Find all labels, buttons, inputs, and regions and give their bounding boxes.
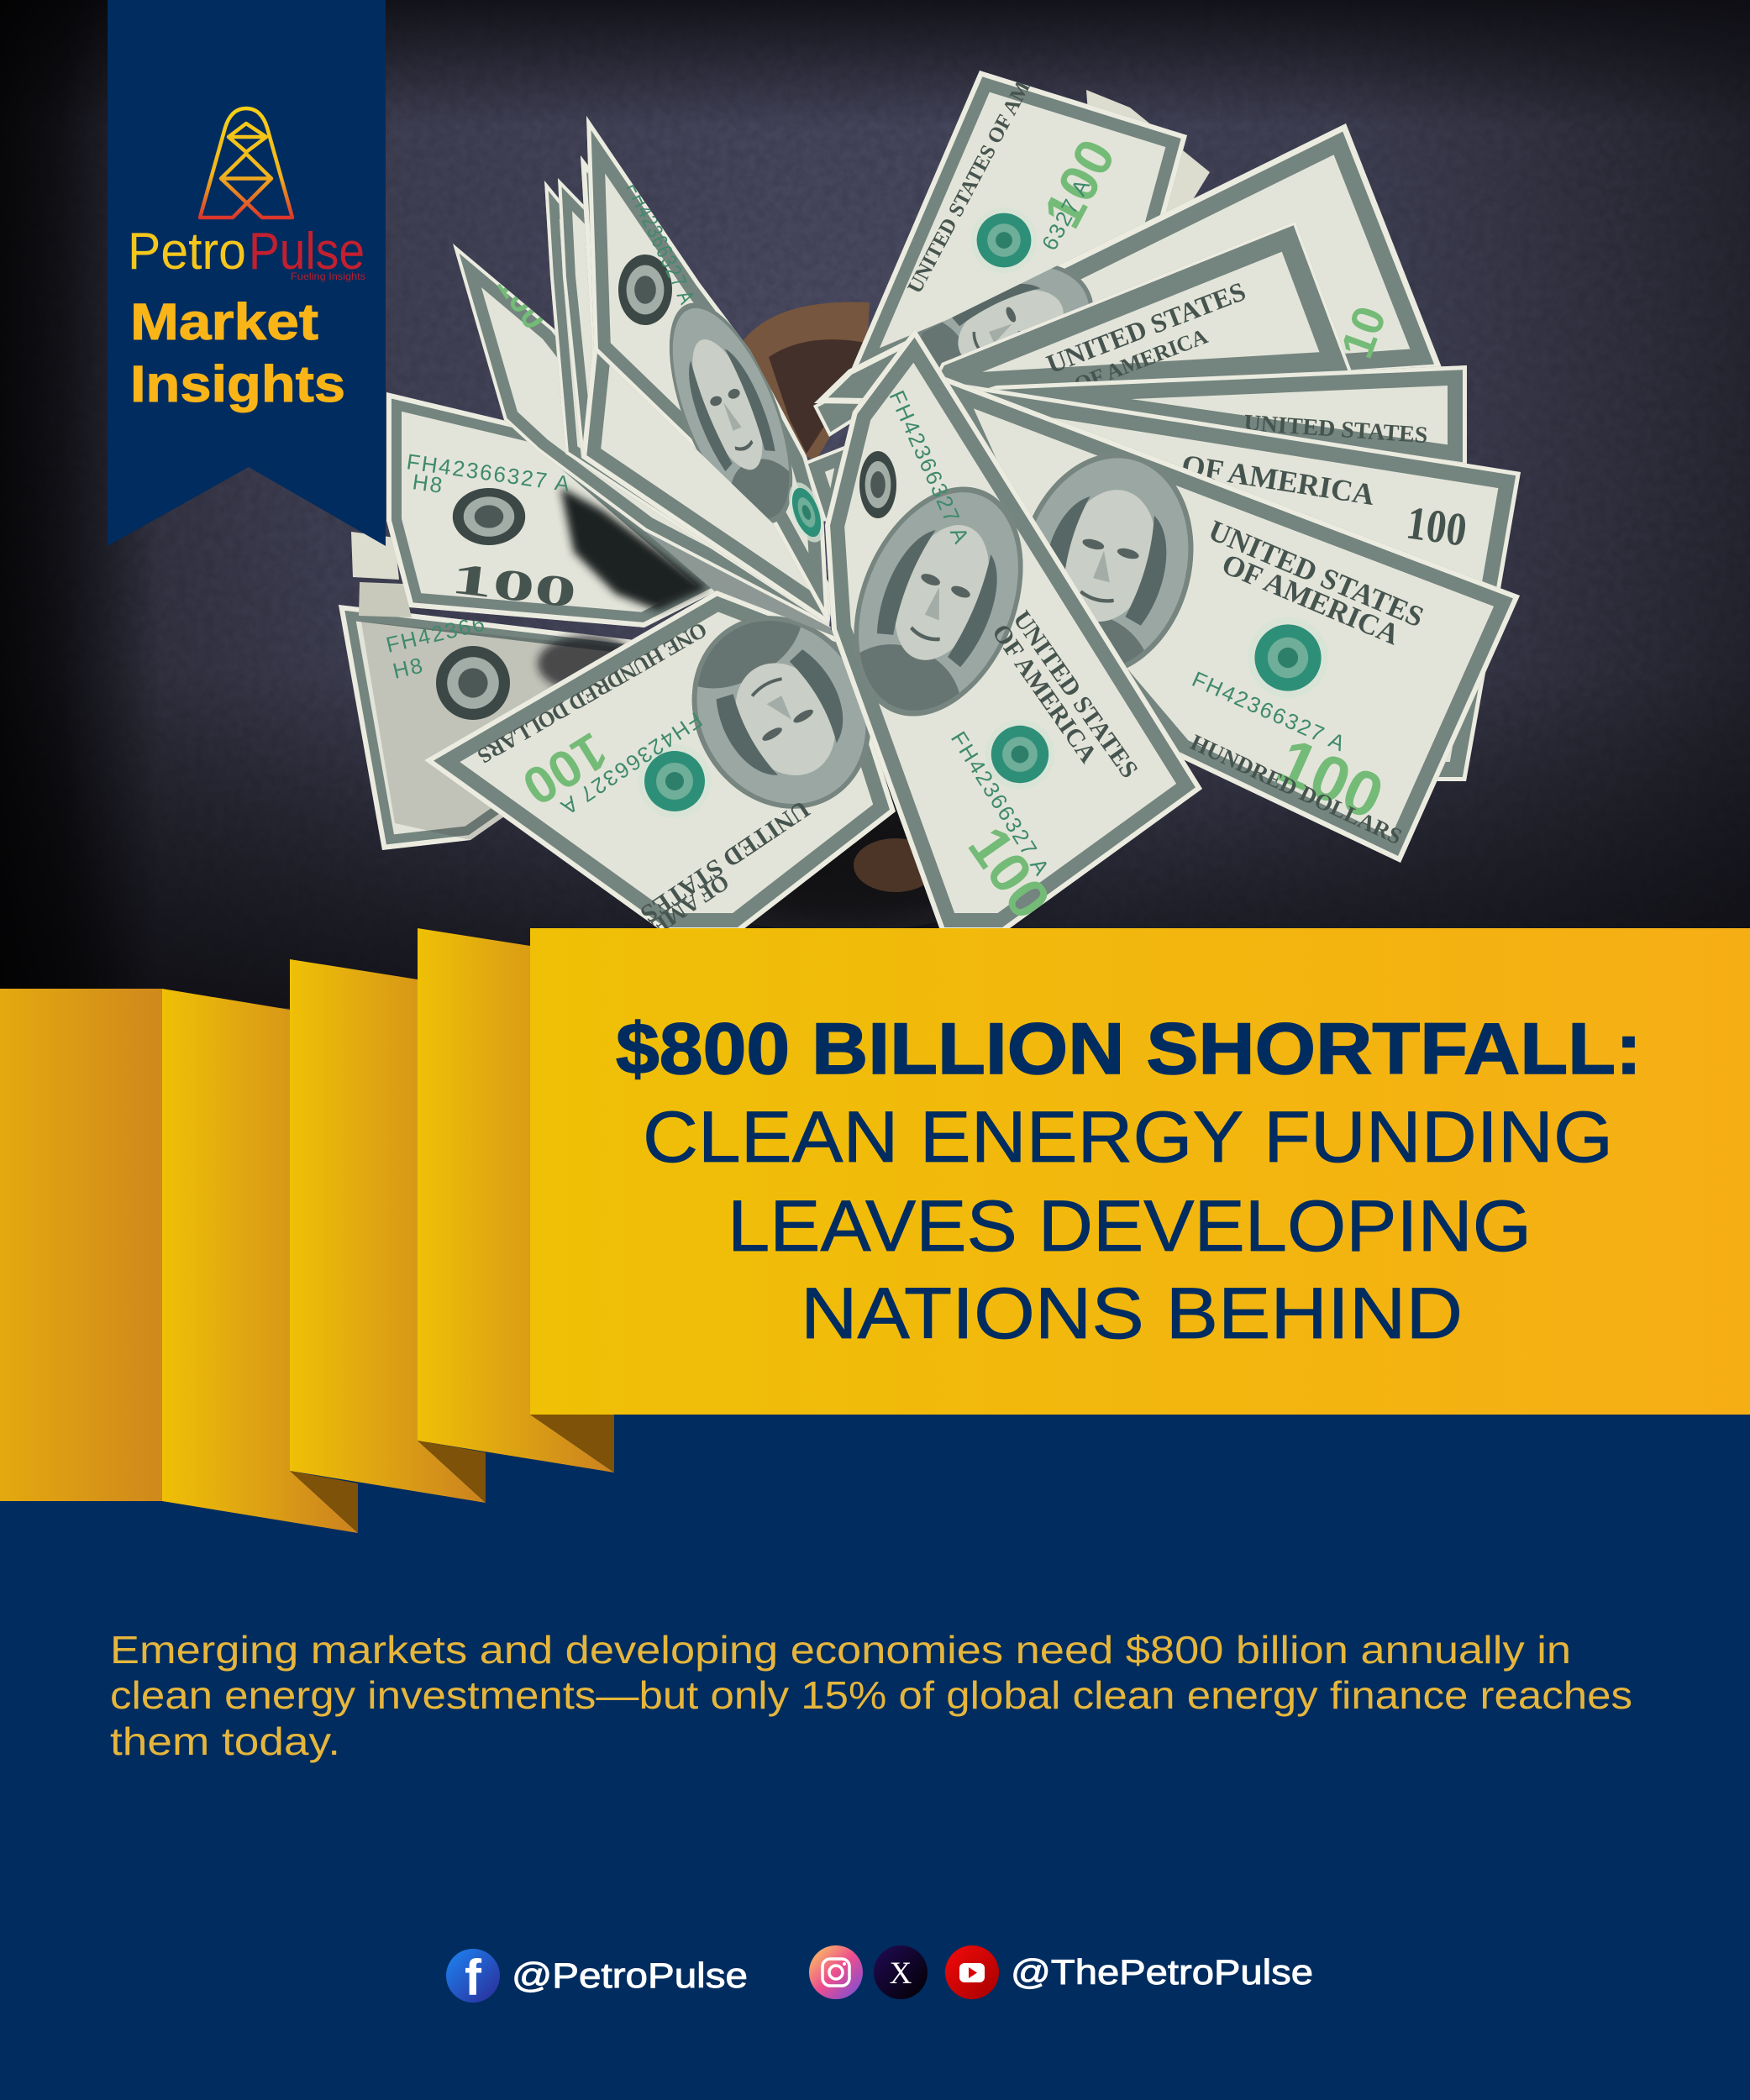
- bill: front right with portrait: FH42366327 A: [1189, 666, 1350, 757]
- icon: instagram: [809, 1945, 863, 1999]
- ribbon panel 4: [418, 928, 614, 1473]
- handle: ThePetroPulse: @ThePetroPulse: [1011, 1952, 1313, 1992]
- photo background: dark textured surface: [0, 0, 1750, 1176]
- stacked bill edges at far left: [351, 532, 412, 617]
- back bill: lower left: [339, 605, 655, 850]
- bill: front centre: FH42366327 A: [946, 727, 1055, 881]
- bill: front centre: UNITED STATES: [1007, 606, 1143, 783]
- title text: $800 BILLION SHORTFALL:: [616, 1009, 1642, 1089]
- title text: LEAVES DEVELOPING: [728, 1186, 1532, 1267]
- icon: X: [874, 1945, 928, 1999]
- bill: right middle with large 100: OF AMERICA: [1180, 448, 1377, 512]
- bill: upper right top: [852, 71, 1187, 368]
- logo wordmark: Pulse: [249, 223, 365, 281]
- bill: front right with portrait: OF AMERICA: [1217, 547, 1405, 652]
- bill: front centre: FH42366327 A: [885, 386, 975, 549]
- icon: X: X: [890, 1956, 912, 1991]
- back bill: lower left: H8: [391, 652, 427, 684]
- top-left navy bookmark banner: [108, 0, 386, 546]
- bill: lower left upside down: 100: [512, 721, 617, 816]
- bill: front right with portrait: UNITED STATES: [1204, 513, 1428, 633]
- title text: CLEAN ENERGY FUNDING: [643, 1097, 1613, 1178]
- bill: lower left upside down: [425, 591, 896, 928]
- upper-left fanned bills: [453, 155, 832, 628]
- back bill: left with serial number: H8: [411, 469, 445, 498]
- bill: lower left upside down: ONE HUNDRED DOLLARS: [474, 617, 711, 769]
- bill: front centre: [820, 328, 1202, 932]
- main left-fan bill: FH42366327 A: [622, 178, 700, 308]
- bill: lower left upside down: UNITED STATES: [635, 795, 815, 928]
- ribbon panel 1: [0, 989, 162, 1501]
- logo wordmark: Petro: [128, 223, 246, 281]
- navy lower background: [0, 1176, 1750, 2100]
- bill: lower left upside down: FH42366327 A: [555, 707, 707, 821]
- paragraph: clean energy investments—but only 15% of global clean energy finance reaches: [110, 1673, 1632, 1717]
- back small piece of top bill: [1086, 90, 1210, 227]
- paragraph: [110, 1628, 1632, 1763]
- ribbon fold shadow 3: [418, 1441, 486, 1503]
- ribbon fold shadow 4: [530, 1415, 614, 1473]
- icon: facebook: f: [465, 1950, 482, 2006]
- ribbon fold shadow 2: [290, 1471, 358, 1533]
- icon: youtube: [945, 1945, 999, 1999]
- upper-left fanned bills: 100: [490, 265, 555, 337]
- icon: facebook: [446, 1949, 500, 2006]
- small bills in the fan centre: [804, 403, 859, 522]
- bill: lower left upside down: OF AMERICA: [598, 869, 733, 972]
- bill: upper right large: 10: [1332, 300, 1396, 365]
- bill: front centre: 100: [956, 816, 1063, 931]
- back bill: left with serial number: [386, 392, 723, 627]
- bill: upper right top: 100: [1032, 129, 1127, 238]
- bill: horizontal right: UNITED STATES: [1243, 410, 1428, 449]
- burlap bag opening: [639, 302, 1042, 932]
- bill: upper right top: 6327 A: [1037, 174, 1096, 255]
- shaded bill between the fan and the lower-left bill: [644, 531, 849, 664]
- back bill: left with serial number: FH42366327 A: [405, 449, 573, 496]
- bill: right middle with large 100: [924, 378, 1521, 781]
- logo: PetroPulse tower: [200, 108, 292, 218]
- bill: upper right second: UNITED STATES: [1043, 276, 1249, 380]
- social handles: [446, 1945, 1313, 2006]
- handle: PetroPulse: @PetroPulse: [512, 1956, 748, 1995]
- logo wordmark: Fueling Insights: [291, 270, 365, 282]
- back bill: lower left: FH42366: [384, 610, 488, 658]
- bill: right middle with large 100: 100: [1403, 497, 1469, 557]
- title text: NATIONS BEHIND: [801, 1273, 1463, 1354]
- folded ribbon: [0, 928, 614, 1533]
- bill: front right with portrait: [937, 374, 1520, 863]
- bill: upper right large: [814, 123, 1443, 430]
- paragraph: Emerging markets and developing economies need $800 billion annually in: [110, 1628, 1571, 1672]
- heading: Market Insights: Insights: [130, 355, 345, 412]
- heading: Market Insights: Market: [130, 293, 318, 350]
- bill: upper right second: OF AMERICA: [1071, 323, 1211, 397]
- paragraph: them today.: [110, 1719, 340, 1763]
- main left-fan bill: [586, 116, 831, 626]
- title text: [616, 1009, 1642, 1354]
- heading: Market Insights: [130, 293, 345, 412]
- bill: upper right top: UNITED STATES OF AMERICA: [903, 18, 1067, 297]
- bill: horizontal right: [966, 365, 1467, 467]
- title banner: [530, 928, 1750, 1415]
- bill: front right with portrait: HUNDRED DOLLARS: [1186, 729, 1406, 849]
- bill: front centre: OF AMERICA: [986, 619, 1102, 768]
- bill: upper right second: [924, 221, 1353, 399]
- bill: front right with portrait: 100: [1267, 725, 1394, 833]
- photo: fan of dollar bills in a burlap bag: [339, 71, 1521, 928]
- ribbon panel 3: [290, 959, 486, 1503]
- logo wordmark: [128, 223, 365, 282]
- ribbon panel 2: [162, 989, 358, 1533]
- back bill: left with serial number: 100: [449, 554, 579, 617]
